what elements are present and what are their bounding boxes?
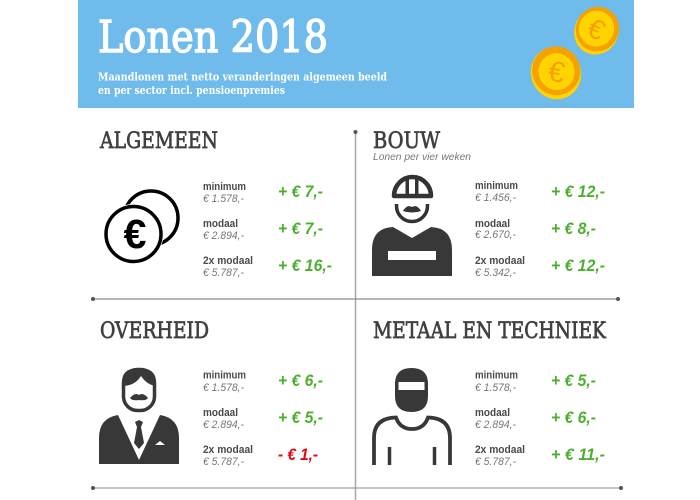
heading: metaal en techniek: METAAL EN TECHNIEK bbox=[373, 319, 606, 344]
icon: gold coin large: € bbox=[546, 56, 567, 90]
row: modaal: € 2.894,- bbox=[203, 419, 244, 431]
row: 2x modaal: + € 16,- bbox=[278, 256, 332, 275]
row: modaal: modaal bbox=[203, 218, 238, 230]
row: modaal: + € 6,- bbox=[551, 408, 596, 427]
icon: gold coin small: € bbox=[583, 12, 610, 47]
panel: metaal en techniek bbox=[373, 319, 606, 468]
subtitle: en per sector incl. pensioenpremies bbox=[98, 84, 285, 97]
row: 2x modaal bbox=[475, 444, 605, 468]
row: 2x modaal bbox=[475, 255, 605, 279]
row: minimum: minimum bbox=[203, 181, 246, 193]
row: modaal: € 2.894,- bbox=[203, 230, 244, 242]
row: modaal bbox=[203, 407, 323, 431]
row: 2x modaal: 2x modaal bbox=[203, 255, 253, 267]
icon: euro coins bbox=[104, 191, 178, 264]
heading: algemeen: ALGEMEEN bbox=[99, 129, 218, 154]
row: 2x modaal: 2x modaal bbox=[475, 444, 525, 456]
row: 2x modaal: - € 1,- bbox=[278, 445, 318, 464]
row: 2x modaal: € 5.787,- bbox=[475, 456, 516, 468]
row: minimum: minimum bbox=[203, 370, 246, 382]
icon: gold coin large bbox=[523, 40, 589, 106]
icon: welder bbox=[374, 368, 450, 465]
grid dividers bbox=[91, 130, 623, 500]
row: minimum bbox=[203, 370, 323, 394]
row: modaal: modaal bbox=[475, 407, 510, 419]
heading: bouw: BOUW bbox=[373, 129, 440, 154]
row: minimum: + € 7,- bbox=[278, 182, 323, 201]
subtitle: Maandlonen met netto veranderingen algemeen beeld bbox=[98, 70, 387, 84]
row: modaal bbox=[475, 218, 596, 241]
row: 2x modaal: € 5.787,- bbox=[203, 456, 244, 468]
row: 2x modaal: 2x modaal bbox=[203, 444, 253, 456]
row: 2x modaal: € 5.342,- bbox=[475, 267, 516, 279]
icon: civil servant in suit bbox=[99, 368, 179, 464]
row: modaal: modaal bbox=[475, 218, 510, 230]
row: minimum: € 1.578,- bbox=[475, 382, 516, 394]
row: modaal: € 2.670,- bbox=[475, 229, 516, 241]
icon: construction worker bbox=[372, 176, 452, 276]
row: 2x modaal bbox=[203, 444, 318, 468]
row: 2x modaal bbox=[203, 255, 332, 279]
row: modaal: + € 7,- bbox=[278, 219, 323, 238]
row: minimum: € 1.456,- bbox=[475, 192, 516, 204]
row: minimum: minimum bbox=[475, 370, 518, 382]
icon: gold coin small bbox=[566, 0, 627, 62]
panel: overheid bbox=[99, 319, 323, 468]
row: modaal: + € 5,- bbox=[278, 408, 323, 427]
row: modaal: modaal bbox=[203, 407, 238, 419]
subtitle bbox=[98, 70, 387, 97]
row: minimum bbox=[475, 180, 605, 204]
panel: bouw bbox=[372, 129, 605, 279]
title: Lonen 2018 bbox=[98, 12, 328, 63]
header banner bbox=[78, 0, 634, 108]
row: 2x modaal: € 5.787,- bbox=[203, 267, 244, 279]
panel: algemeen bbox=[99, 129, 332, 279]
heading: overheid: OVERHEID bbox=[100, 319, 209, 344]
row: 2x modaal: + € 12,- bbox=[551, 256, 605, 275]
row: modaal bbox=[203, 218, 323, 242]
row: modaal bbox=[475, 407, 596, 431]
row: modaal: € 2.894,- bbox=[475, 419, 516, 431]
row: minimum bbox=[475, 370, 596, 394]
row: minimum: € 1.578,- bbox=[203, 193, 244, 205]
row: minimum: + € 6,- bbox=[278, 371, 323, 390]
row: minimum bbox=[203, 181, 323, 205]
row: minimum: + € 12,- bbox=[551, 182, 605, 201]
row: minimum: € 1.578,- bbox=[203, 382, 244, 394]
note: lonen per vier weken: Lonen per vier weken bbox=[373, 152, 471, 163]
row: 2x modaal: + € 11,- bbox=[551, 445, 605, 464]
icon: euro coins: € bbox=[124, 211, 147, 257]
row: 2x modaal: 2x modaal bbox=[475, 255, 525, 267]
row: minimum: minimum bbox=[475, 180, 518, 192]
row: modaal: + € 8,- bbox=[551, 219, 596, 238]
row: minimum: + € 5,- bbox=[551, 371, 596, 390]
